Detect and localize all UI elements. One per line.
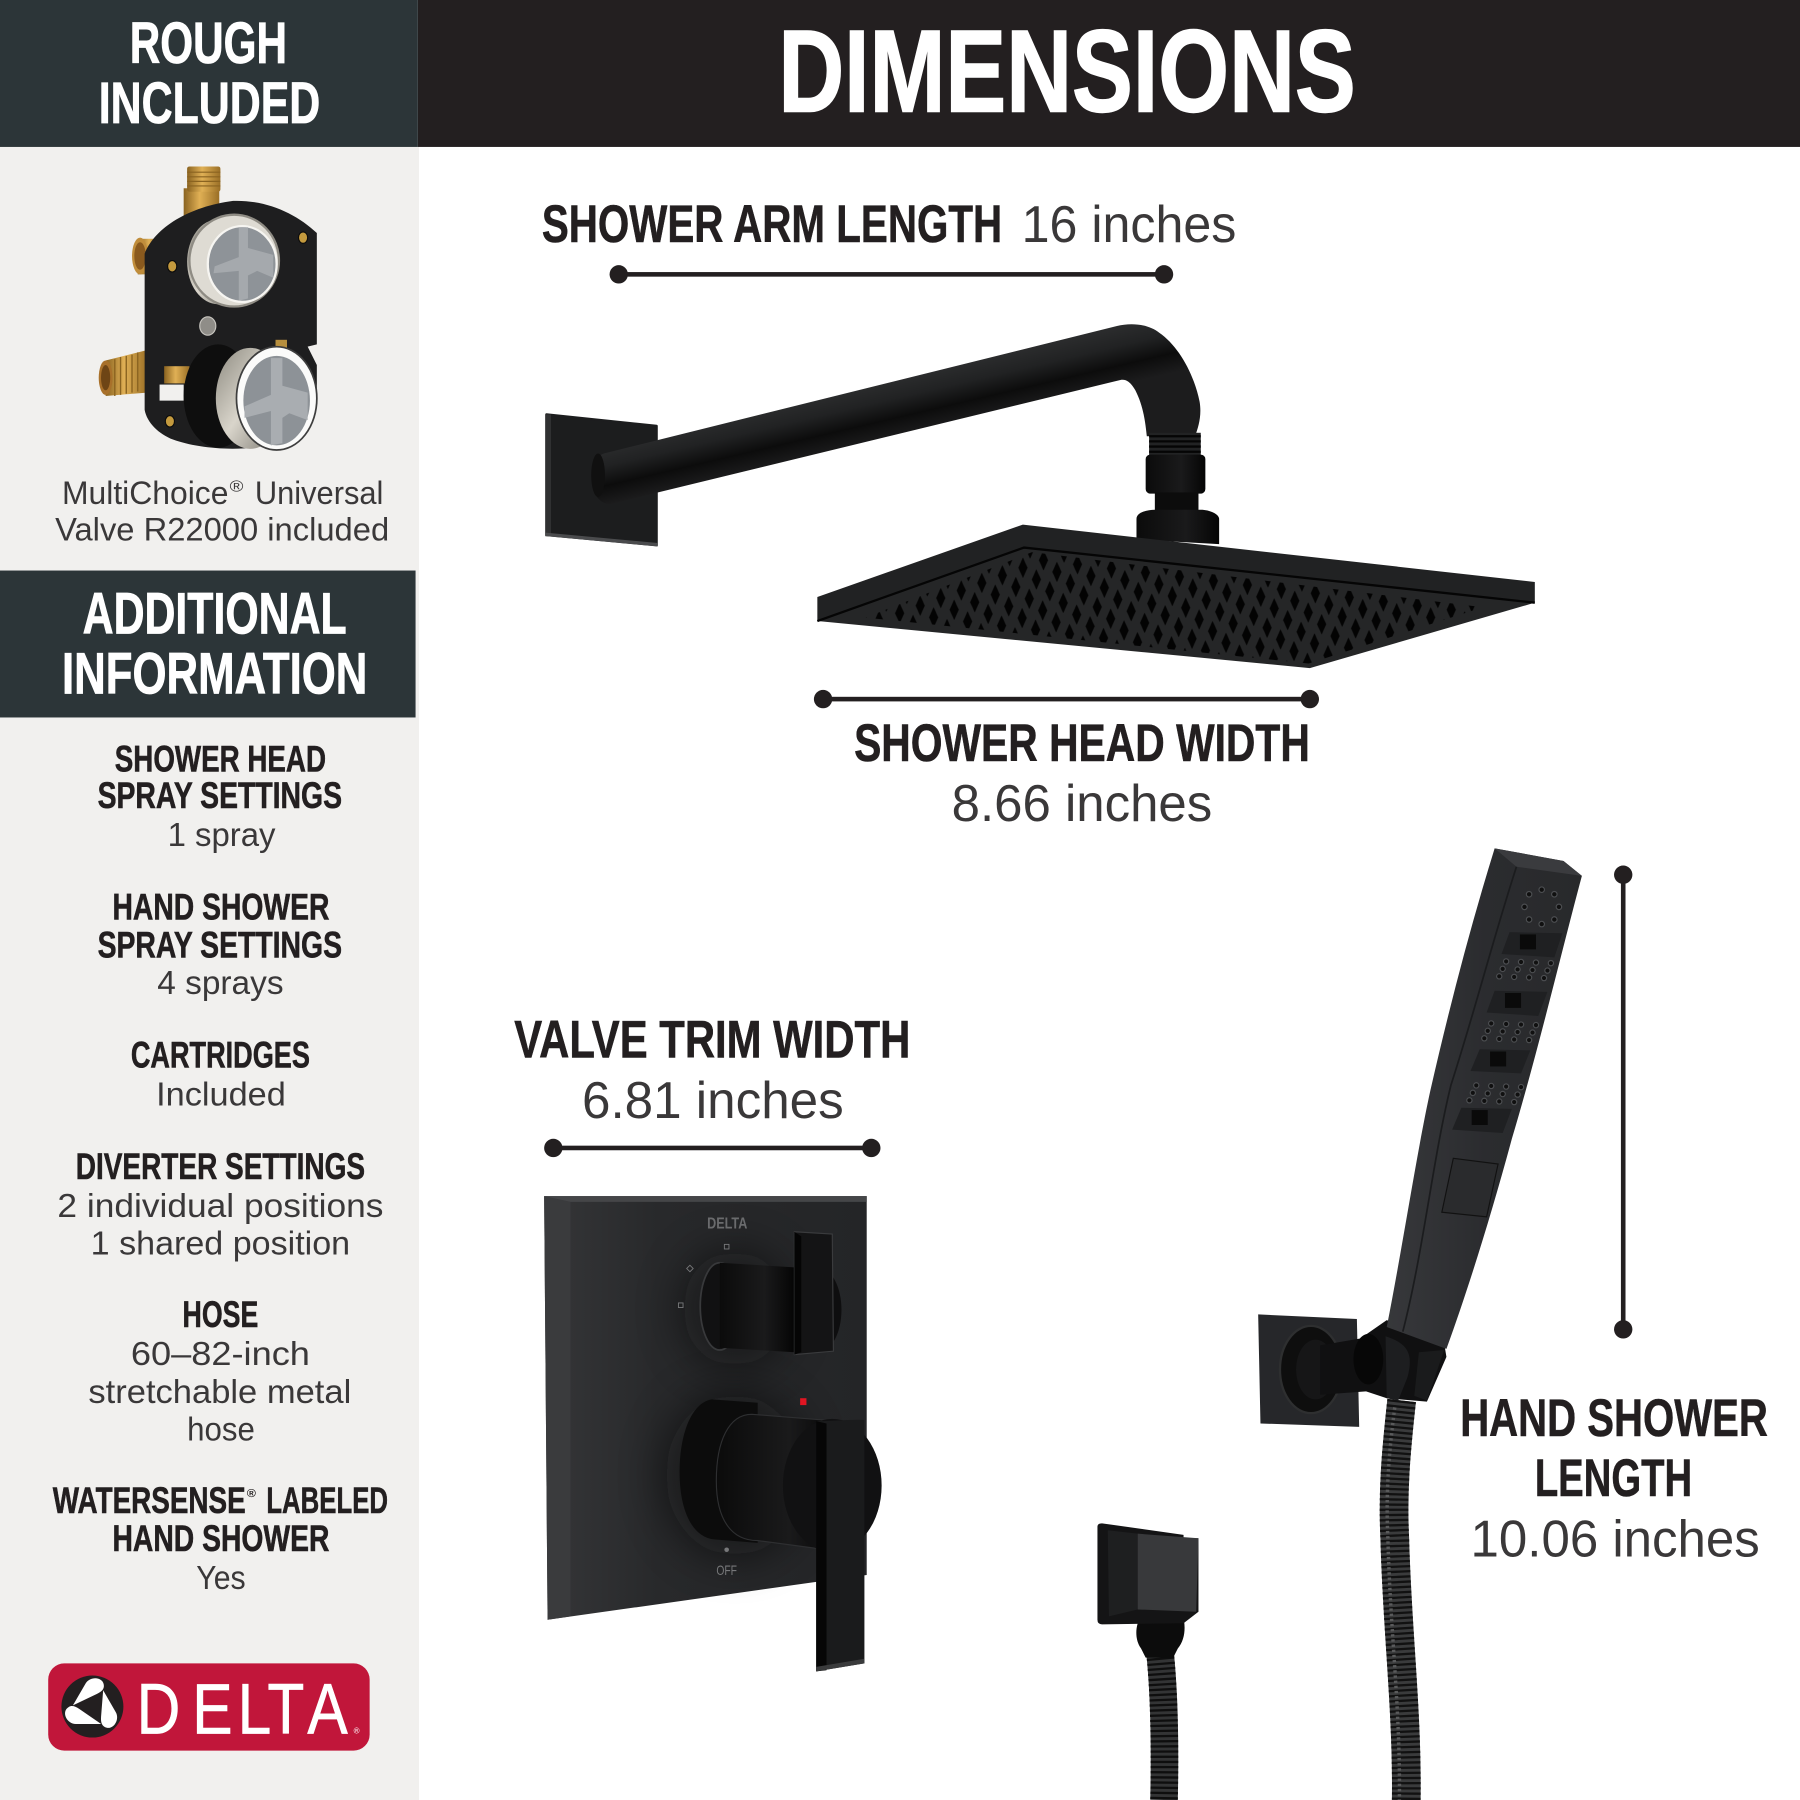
text block: hose: HOSE [183,1294,258,1335]
trim plate [544,1196,867,1620]
label: shower arm length: 16 inches [1022,195,1236,253]
icon: MultiChoice rough valve [99,166,317,450]
text block: shower head spray settings: SHOWER HEAD [115,738,326,779]
inset panel [1442,1158,1498,1217]
black mounting plate [145,201,317,449]
icon: Delta triangle mark [61,1676,127,1738]
text block: diverter settings: 1 shared position [91,1226,350,1263]
left lower threaded brass pipe [99,350,147,396]
hand shower body [1387,848,1582,1349]
header: additional information: INFORMATION [62,641,367,706]
label: shower head width: SHOWER HEAD WIDTH [854,714,1310,773]
label: valve trim width: 6.81 inches [582,1071,844,1129]
caption: MultiChoice valve: Valve R22000 included [55,512,389,548]
left upper brass pipe [132,238,163,274]
mounting holes [165,232,308,427]
screw [200,317,216,335]
spray nozzle ring [1522,887,1562,927]
header: rough included [0,0,418,147]
text block: watersense: Yes [196,1560,246,1597]
text block: cartridges: CARTRIDGES [131,1035,310,1076]
label: shower arm length: SHOWER ARM LENGTH [542,195,1002,254]
title: DIMENSIONS [778,5,1356,136]
label: hand shower length: 10.06 inches [1471,1510,1760,1568]
text block: hose: stretchable metal [88,1374,351,1411]
spray nozzle clusters [1497,959,1554,981]
dimension line: hand shower [1614,866,1632,1339]
dimension line: valve trim [544,1139,880,1157]
label: valve trim width [514,1010,910,1129]
text block: diverter settings [57,1146,383,1263]
header: rough included: ROUGH [130,11,287,76]
wall bracket flange [1258,1314,1359,1427]
label: hand shower length [1460,1389,1768,1568]
threads [1149,433,1201,456]
wordmark: DELTA [137,1669,348,1749]
text block: hand shower spray settings: SPRAY SETTINGS [98,924,342,965]
illustration: hand shower [1258,848,1582,1800]
header: additional information: ADDITIONAL [83,582,347,647]
plate markings: DELTA [707,1214,748,1232]
collar and neck [1136,455,1219,544]
header: rough included: INCLUDED [99,71,320,136]
dimension line: shower arm [610,265,1173,284]
text block: hose [88,1294,351,1449]
text block: hand shower spray settings: 4 sprays [157,965,284,1002]
header: additional information [0,571,416,717]
logo: Delta: ® [354,1726,360,1735]
label: valve trim width: VALVE TRIM WIDTH [514,1010,910,1069]
illustration: shower arm and head [545,324,1538,677]
elbow body [1097,1523,1198,1624]
caption: MultiChoice valve: Universal [255,475,383,511]
text block: watersense: WATERSENSE [53,1480,246,1521]
logo: Delta [48,1663,370,1751]
rain head [804,525,1538,677]
text block: watersense [53,1480,388,1597]
text block: cartridges: Included [156,1076,286,1113]
caption: MultiChoice valve: ® [230,477,244,495]
hose [1387,1401,1406,1800]
text block: watersense: HAND SHOWER [113,1518,329,1559]
upper cartridge opening [187,215,279,307]
caption: MultiChoice valve: MultiChoice [62,475,228,511]
text block: shower head spray settings: 1 spray [168,817,276,854]
text block: watersense: ® [247,1488,257,1500]
label: hand shower length: LENGTH [1535,1449,1692,1508]
spray selector buttons [1452,932,1562,1133]
illustration: wall elbow and hose [1097,1523,1198,1800]
text block: hose: hose [187,1412,255,1449]
panel: left sidebar [0,0,419,1800]
label: shower head width: 8.66 inches [952,774,1212,832]
text block: hand shower spray settings: HAND SHOWER [113,887,329,928]
diverter knob [700,1232,841,1355]
text block: hose: 60–82-inch [131,1336,310,1373]
text block: shower head spray settings [98,738,342,854]
top brass fitting [184,166,220,218]
connector nut [1136,1614,1185,1658]
caption: MultiChoice valve [55,475,389,548]
label: shower head width [854,714,1310,832]
header: dimensions banner [418,0,1800,147]
text block: hand shower spray settings [98,887,342,1002]
arm tube [591,324,1200,504]
text block: shower head spray settings: SPRAY SETTINGS [98,775,342,816]
plate markings [678,1214,806,1578]
plate markings: OFF [716,1563,737,1578]
illustration: valve trim [544,1196,882,1671]
wall flange [545,414,658,546]
temperature knob and lever [680,1399,882,1671]
text block: diverter settings: 2 individual positions [57,1188,383,1225]
dimension line: shower head [814,690,1319,708]
text block: diverter settings: DIVERTER SETTINGS [76,1146,365,1187]
bracket arm and cradle [1320,1320,1446,1402]
hose [1159,1647,1164,1800]
lower cartridge opening [216,347,317,450]
text block: watersense: LABELED [266,1480,388,1521]
text block: cartridges [131,1035,310,1113]
